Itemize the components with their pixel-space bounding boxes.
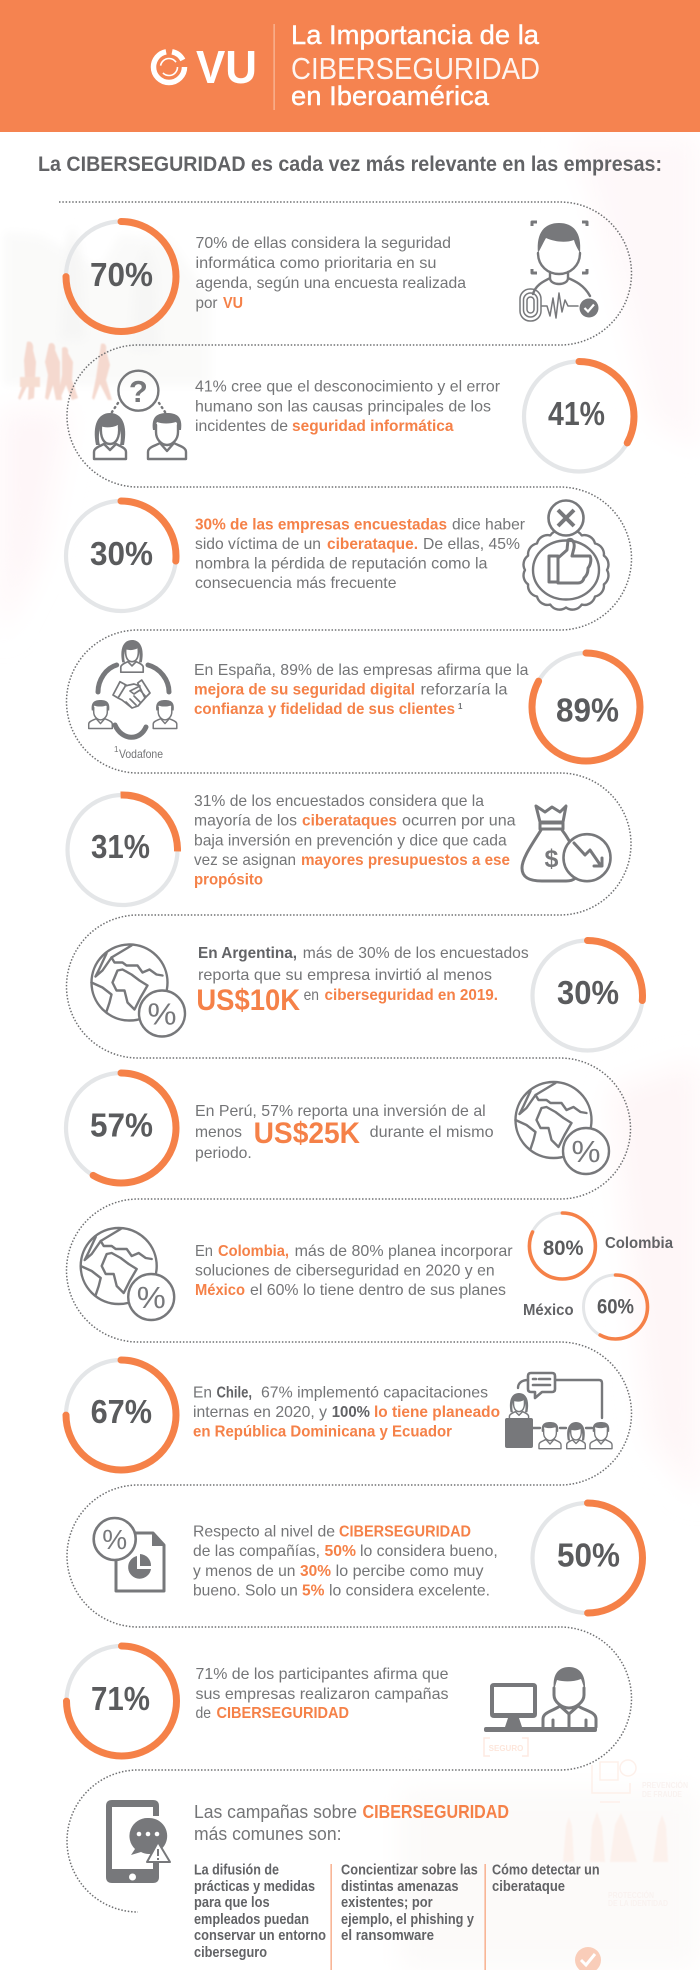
progress ring 67%: 67% (91, 1393, 152, 1430)
column divider (330, 1864, 332, 1970)
text block: US$25K (254, 1117, 360, 1150)
panel: 30% víctima (66, 500, 608, 611)
panel: 50% nivel (94, 1503, 642, 1613)
text block (195, 379, 500, 435)
text block: lo percibe como muy (336, 1563, 484, 1580)
header band (0, 0, 700, 132)
heading text: más comunes son: (194, 1824, 342, 1844)
progress ring 57% (66, 1073, 176, 1183)
text block: incidentes de (195, 418, 288, 435)
icon: globe with percent (81, 1228, 174, 1320)
column 1: La difusión de (194, 1862, 279, 1878)
text block: seguridad informática (292, 418, 454, 435)
faint seguro tag: SEGURO (489, 1744, 523, 1753)
text block (193, 1524, 498, 1600)
VU logo: VU (196, 41, 257, 93)
text block: agenda, según una encuesta realizada (196, 275, 466, 292)
page background: DE FRAUDE (642, 1789, 682, 1799)
progress ring 89%: 89% (556, 692, 619, 729)
text block (195, 1103, 494, 1162)
text block: En Argentina, (198, 945, 297, 962)
text block: US$10K (196, 984, 300, 1017)
text block (196, 235, 466, 312)
text block: De ellas, 45% (423, 536, 520, 553)
panel: 30% Argentina (92, 940, 642, 1050)
text block: más de 80% planea incorporar (295, 1243, 513, 1260)
text block: bueno. Solo un (193, 1583, 298, 1600)
heading text: CIBERSEGURIDAD (362, 1802, 509, 1822)
text block: vez se asignan (194, 852, 296, 869)
text block: en (304, 987, 319, 1004)
heading text: Las campañas sobre (194, 1802, 357, 1822)
panel: campañas comunes (106, 1800, 601, 1970)
progress ring Colombia 80%: 80% (543, 1237, 584, 1260)
icon: globe with percent (516, 1082, 609, 1174)
heading text (194, 1802, 509, 1844)
dotted serpentine connector (59, 202, 632, 1912)
column 2: distintas amenazas (341, 1879, 458, 1895)
progress ring 50% (532, 1503, 642, 1613)
text block: confianza y fidelidad de sus clientes (194, 701, 455, 718)
faint silhouettes and icons bottom right (563, 1812, 668, 1862)
icon: report with percent (94, 1518, 165, 1591)
text block: lo tiene planeado (374, 1404, 500, 1421)
progress ring 70% (66, 222, 176, 332)
text block (193, 1384, 500, 1441)
progress ring 31%: 31% (91, 828, 150, 865)
progress ring México 60% (584, 1275, 648, 1339)
icon: question and people (94, 371, 186, 459)
text block: reforzaría la (420, 682, 508, 699)
text block: En (195, 1243, 213, 1260)
text block: mejora de su seguridad digital (194, 682, 415, 699)
progress ring 70%: 70% (90, 256, 153, 293)
text block: 70% de ellas considera la seguridad (196, 235, 451, 252)
panel: Colombia y México (81, 1213, 673, 1339)
icon: money bag and falling coin (522, 806, 610, 881)
footnote: 1 (114, 745, 119, 754)
column 3: Cómo detectar un (492, 1862, 600, 1878)
text block: propósito (194, 872, 263, 889)
text block: lo considera excelente. (329, 1583, 490, 1600)
text block: periodo. (195, 1145, 252, 1162)
title: en Iberoamérica (291, 81, 490, 111)
column divider (484, 1864, 486, 1970)
text block: más de 30% de los encuestados (303, 945, 529, 962)
faint silhouettes left (18, 341, 112, 400)
column 1: empleados puedan (194, 1912, 309, 1928)
text block: por (196, 295, 218, 312)
column 1 (194, 1862, 326, 1961)
icon: phone with chat and warning (106, 1800, 170, 1883)
header divider (274, 24, 275, 110)
progress ring 41% (524, 362, 634, 472)
text block: 31% de los encuestados considera que la (194, 793, 484, 810)
column 1: prácticas y medidas (194, 1879, 315, 1895)
icon: person at computer (484, 1667, 597, 1732)
text block: Colombia, (218, 1243, 289, 1260)
text block: mayores presupuestos a ese (301, 852, 510, 869)
panel: 31% inversión (66, 793, 611, 907)
text block (196, 945, 529, 1017)
text block: dice haber (452, 516, 525, 533)
progress ring 30% (532, 940, 642, 1050)
page background: PREVENCIÓN (642, 1779, 688, 1790)
page background: DE LA IDENTIDAD (608, 1898, 668, 1908)
text block (196, 1666, 449, 1722)
column 1: conservar un entorno (194, 1928, 326, 1944)
text block (194, 793, 516, 889)
icon: money bag and falling coin: $ (545, 845, 559, 873)
icon: team handshake (89, 640, 177, 737)
footnote: Vodafone (119, 747, 163, 761)
text block: nombra la pérdida de reputación como la (195, 556, 488, 573)
text block: informática como prioritaria en su (196, 255, 436, 272)
text block: mayoría de los (194, 813, 297, 830)
text block: En (193, 1384, 212, 1401)
progress ring 71% (66, 1646, 176, 1756)
column 2: Concientizar sobre las (341, 1862, 478, 1878)
VU logo (154, 41, 257, 93)
column 1: ciberseguro (194, 1945, 267, 1961)
column 3: ciberataque (492, 1879, 565, 1895)
faint check mark (575, 1947, 601, 1970)
progress ring 89% (532, 653, 640, 761)
text block: sido víctima de un (195, 536, 321, 553)
text block: 41% cree que el desconocimiento y el error (195, 379, 500, 396)
text block: reporta que su empresa invirtió al menos (198, 967, 492, 984)
text block: durante el mismo (370, 1124, 494, 1141)
progress ring México 60%: 60% (597, 1296, 634, 1318)
text block: ciberataques (302, 813, 397, 830)
text block: menos (195, 1124, 242, 1141)
text block: 1 (458, 702, 463, 711)
label México: México (523, 1302, 574, 1319)
text block: Respecto al nivel de (193, 1524, 335, 1541)
text block: México (195, 1282, 245, 1299)
text block (195, 1243, 513, 1299)
faint seguro tag (484, 1738, 528, 1756)
progress ring Colombia 80% (529, 1213, 595, 1279)
icon: question and people: ? (129, 374, 148, 409)
panel: 57% Perú (66, 1073, 609, 1183)
panel: 41% error humano (94, 362, 634, 472)
text block (195, 516, 525, 592)
progress ring 31% (66, 793, 179, 907)
title (291, 20, 540, 111)
panel: 70% prioritaria (66, 222, 598, 332)
column 3 (492, 1862, 600, 1895)
icon: report with percent: % (102, 1524, 127, 1555)
column 2: existentes; por (341, 1895, 433, 1911)
title: CIBERSEGURIDAD (291, 51, 540, 86)
text block: el 60% lo tiene dentro de sus planes (250, 1282, 506, 1299)
progress ring 71%: 71% (91, 1680, 150, 1717)
text block: En España, 89% de las empresas afirma que la (194, 662, 529, 679)
text block: En Perú, 57% reporta una inversión de al (195, 1103, 486, 1120)
text block: 30% de las empresas encuestadas (195, 516, 447, 533)
text block: humano son las causas principales de los (195, 398, 491, 416)
text block: soluciones de ciberseguridad en 2020 y en (195, 1263, 495, 1280)
text block: lo considera bueno, (360, 1543, 498, 1560)
progress ring 30%: 30% (90, 535, 153, 572)
icon: globe with percent (92, 944, 185, 1036)
text block: de (196, 1705, 211, 1722)
text block: sus empresas realizaron campañas (196, 1686, 449, 1703)
text block (194, 662, 529, 718)
text block: 5% (302, 1583, 324, 1600)
text block: de las compañías, (193, 1543, 320, 1560)
panel: 71% campañas (66, 1646, 597, 1756)
text block: ciberataque. (327, 536, 418, 553)
progress ring 41%: 41% (548, 395, 605, 432)
text block: 71% de los participantes afirma que (196, 1666, 449, 1683)
progress ring 30%: 30% (557, 974, 619, 1011)
progress ring 57%: 57% (90, 1107, 153, 1144)
text block: consecuencia más frecuente (195, 575, 397, 592)
progress ring 50%: 50% (557, 1537, 620, 1574)
column 2: el ransomware (341, 1928, 434, 1944)
text block: en República Dominicana y Ecuador (193, 1424, 452, 1441)
text block: ciberseguridad en 2019. (324, 987, 498, 1004)
text block: CIBERSEGURIDAD (216, 1705, 349, 1722)
panel: 67% Chile (66, 1360, 612, 1470)
text block: 50% (324, 1543, 356, 1560)
text block: VU (223, 295, 243, 312)
icon: presenter and audience (505, 1373, 612, 1449)
title: La Importancia de la (291, 20, 540, 50)
panel: 89% España (89, 640, 640, 761)
column 1: para que los (194, 1895, 270, 1911)
text block: ocurren por una (402, 813, 516, 830)
page background: PROTECCIÓN (608, 1889, 654, 1900)
text block: baja inversión en prevención y dice que cada (194, 832, 507, 849)
column 2: ejemplo, el phishing y (341, 1912, 474, 1928)
text block: 30% (300, 1563, 331, 1580)
icon: thumb badge (524, 500, 608, 610)
subtitle heading: La CIBERSEGURIDAD es cada vez más relevante en las empresas: (38, 153, 662, 176)
icon: face and biometrics (520, 222, 598, 321)
progress ring 67% (66, 1360, 176, 1470)
text block: 100% (332, 1404, 370, 1421)
text block: CIBERSEGURIDAD (339, 1524, 471, 1541)
text block: 67% implementó capacitaciones (261, 1384, 488, 1401)
text block: Chile, (216, 1384, 252, 1401)
text block: y menos de un (193, 1563, 296, 1580)
progress ring 30% (66, 501, 176, 611)
column 2 (341, 1862, 478, 1944)
text block: internas en 2020, y (193, 1404, 327, 1421)
label Colombia: Colombia (605, 1235, 673, 1252)
